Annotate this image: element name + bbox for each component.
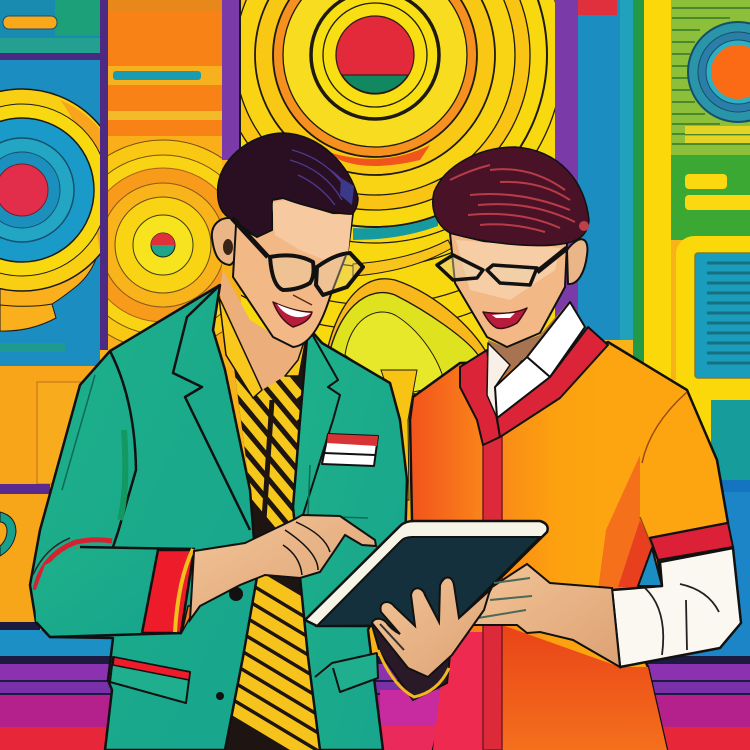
panel: bottom stripes — [0, 656, 750, 750]
hair — [218, 133, 358, 237]
man's pointing hand — [190, 515, 376, 620]
glasses — [232, 218, 363, 295]
panel: right columns — [555, 0, 750, 660]
lower right pocket — [315, 653, 378, 692]
tablet — [305, 521, 548, 626]
ear — [212, 218, 238, 265]
cuff — [142, 549, 197, 633]
face — [450, 233, 567, 347]
jacket right front — [293, 327, 407, 750]
white collar — [487, 343, 510, 418]
person: woman in orange sweater — [410, 147, 741, 750]
pocket square — [322, 434, 378, 466]
person: man in green jacket — [30, 133, 407, 750]
sweater side shading — [598, 455, 652, 590]
ear — [567, 239, 587, 284]
panel: left column — [0, 0, 123, 658]
panel: second column — [100, 0, 222, 350]
neck — [488, 300, 570, 390]
elbow stripes — [33, 538, 112, 608]
mouth — [273, 302, 312, 327]
lapel left — [173, 285, 250, 530]
neck — [219, 270, 307, 390]
sleeve under the holding hand — [372, 625, 450, 700]
woman's supporting hand — [473, 564, 620, 667]
forearm sleeve — [35, 547, 158, 637]
hair — [433, 147, 589, 246]
mouth — [483, 308, 527, 328]
hand holding tablet — [372, 578, 490, 677]
face — [233, 198, 353, 347]
jacket buttons — [216, 587, 243, 700]
red placket — [483, 436, 502, 750]
sweater — [410, 342, 728, 750]
glasses — [437, 248, 567, 285]
lapel right — [303, 327, 340, 515]
panel: central target — [222, 0, 555, 500]
lower left pocket — [110, 657, 190, 703]
red collar — [460, 350, 500, 445]
shirt — [217, 293, 325, 750]
lower sweater — [433, 632, 483, 750]
white sleeve — [612, 523, 741, 667]
jacket left front and arm — [30, 285, 257, 750]
